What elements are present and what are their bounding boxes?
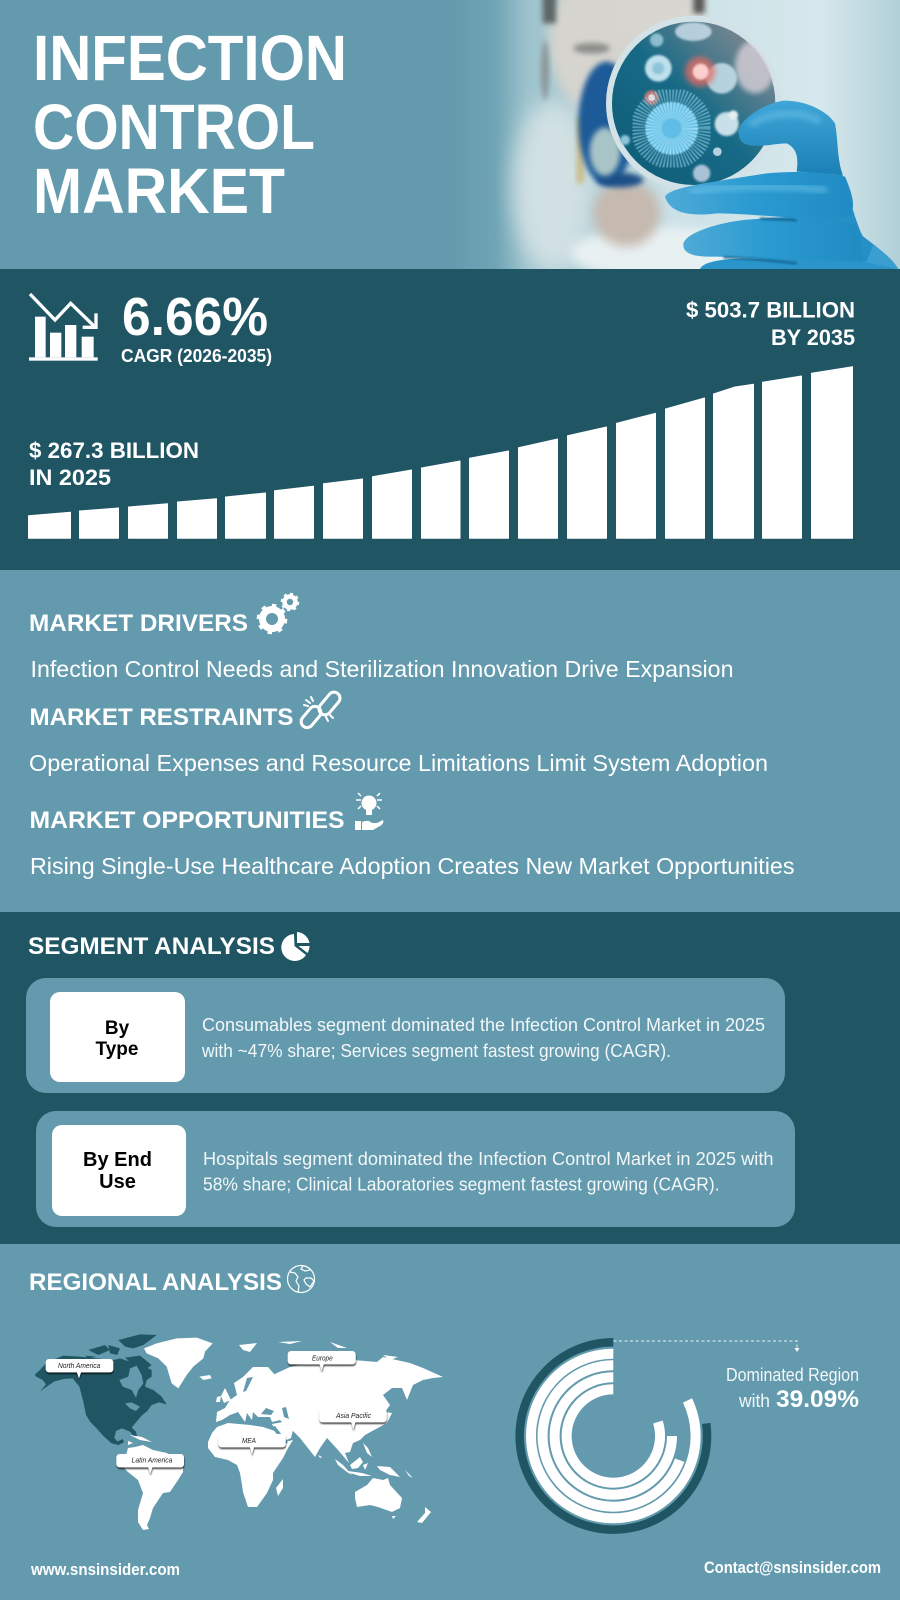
callout: Europe: Europe (312, 1353, 333, 1362)
panel: market dynamics (29, 594, 794, 879)
label: by end use: Use (99, 1171, 136, 1193)
header photo: scientist holding petri dish (480, 0, 900, 269)
radial chart: regional share (520, 1342, 707, 1530)
2025 value label (29, 438, 199, 490)
panel: market size band (0, 269, 900, 570)
world map (35, 1334, 443, 1530)
title: INFECTION (33, 22, 347, 94)
CAGR value: 6.66% (122, 287, 268, 347)
bar chart: market growth (28, 367, 852, 538)
petri dish (609, 19, 778, 188)
title (33, 22, 347, 227)
icon: pie chart (281, 932, 310, 961)
card: by end use (36, 1111, 795, 1227)
2035 value label (686, 298, 855, 350)
text: opportunities: Rising Single-Use Healthcare Adoption Creates New Market Opportunities (30, 853, 794, 879)
callout: MEA: MEA (242, 1436, 256, 1445)
2025 value label: $ 267.3 BILLION (29, 438, 199, 463)
heading: market opportunities: MARKET OPPORTUNITIES (30, 807, 344, 834)
title: MARKET (33, 155, 285, 227)
text: by end use description (203, 1149, 774, 1194)
2025 value label: IN 2025 (29, 465, 111, 490)
callout: dominated region: 39.09% (776, 1386, 859, 1413)
callout: dominated region: Dominated Region (726, 1365, 859, 1385)
callout: MEA (218, 1434, 286, 1455)
map: rest of world (123, 1338, 443, 1530)
footer website: www.snsinsider.com (30, 1561, 180, 1579)
title: CONTROL (33, 91, 315, 163)
callout: North America (46, 1359, 113, 1378)
footer contact: Contact@snsinsider.com (704, 1559, 881, 1577)
callout: Europe (288, 1351, 356, 1371)
text: by end use description: 58% share; Clinical Laboratories segment fastest growing (CAGR). (203, 1174, 720, 1194)
2035 value label: BY 2035 (771, 325, 855, 350)
icon: gears (258, 594, 298, 633)
text: by type description (201, 1015, 765, 1061)
CAGR label: CAGR (2026-2035) (121, 345, 272, 366)
text: by type description: with ~47% share; Services segment fastest growing (CAGR). (201, 1041, 671, 1061)
callout: Asia Pacific (319, 1409, 387, 1430)
label: by type: Type (96, 1039, 138, 1060)
blue glove (665, 101, 898, 269)
callout: Latin America (116, 1454, 184, 1474)
card: by type (26, 978, 785, 1093)
label: by end use (83, 1149, 152, 1193)
icon: broken chain link (299, 690, 342, 730)
heading: segment analysis: SEGMENT ANALYSIS (28, 933, 275, 960)
2035 value label: $ 503.7 BILLION (686, 298, 855, 322)
label: by type: By (105, 1018, 130, 1039)
icon: declining chart (29, 294, 98, 361)
text: by type description: Consumables segment dominated the Infection Control Market in 2025 (202, 1015, 765, 1035)
label: by end use: By End (83, 1149, 152, 1171)
text: by end use description: Hospitals segment dominated the Infection Control Market in 2025 with (203, 1149, 774, 1169)
callout: dominated region (726, 1365, 859, 1413)
heading: market drivers: MARKET DRIVERS (29, 610, 248, 637)
callout: Latin America: Latin America (132, 1456, 172, 1465)
label: by type (96, 1018, 138, 1060)
heading: market restraints: MARKET RESTRAINTS (30, 704, 294, 731)
greenland and iceland (144, 1338, 213, 1388)
callout: North America: North America (58, 1361, 100, 1370)
icon: globe (288, 1266, 314, 1292)
panel: regional analysis (29, 1266, 859, 1530)
panel: segment analysis (0, 912, 900, 1244)
map callouts (46, 1351, 387, 1474)
callout: Asia Pacific: Asia Pacific (335, 1411, 371, 1420)
map: north america highlighted (35, 1334, 167, 1445)
leader line (614, 1341, 800, 1352)
icon: hand holding light bulb (355, 793, 383, 830)
text: restraints: Operational Expenses and Resource Limitations Limit System Adoption (29, 750, 768, 776)
heading: regional analysis: REGIONAL ANALYSIS (29, 1269, 282, 1296)
text: drivers: Infection Control Needs and Sterilization Innovation Drive Expansion (30, 656, 734, 682)
callout: dominated region: with (738, 1391, 770, 1411)
